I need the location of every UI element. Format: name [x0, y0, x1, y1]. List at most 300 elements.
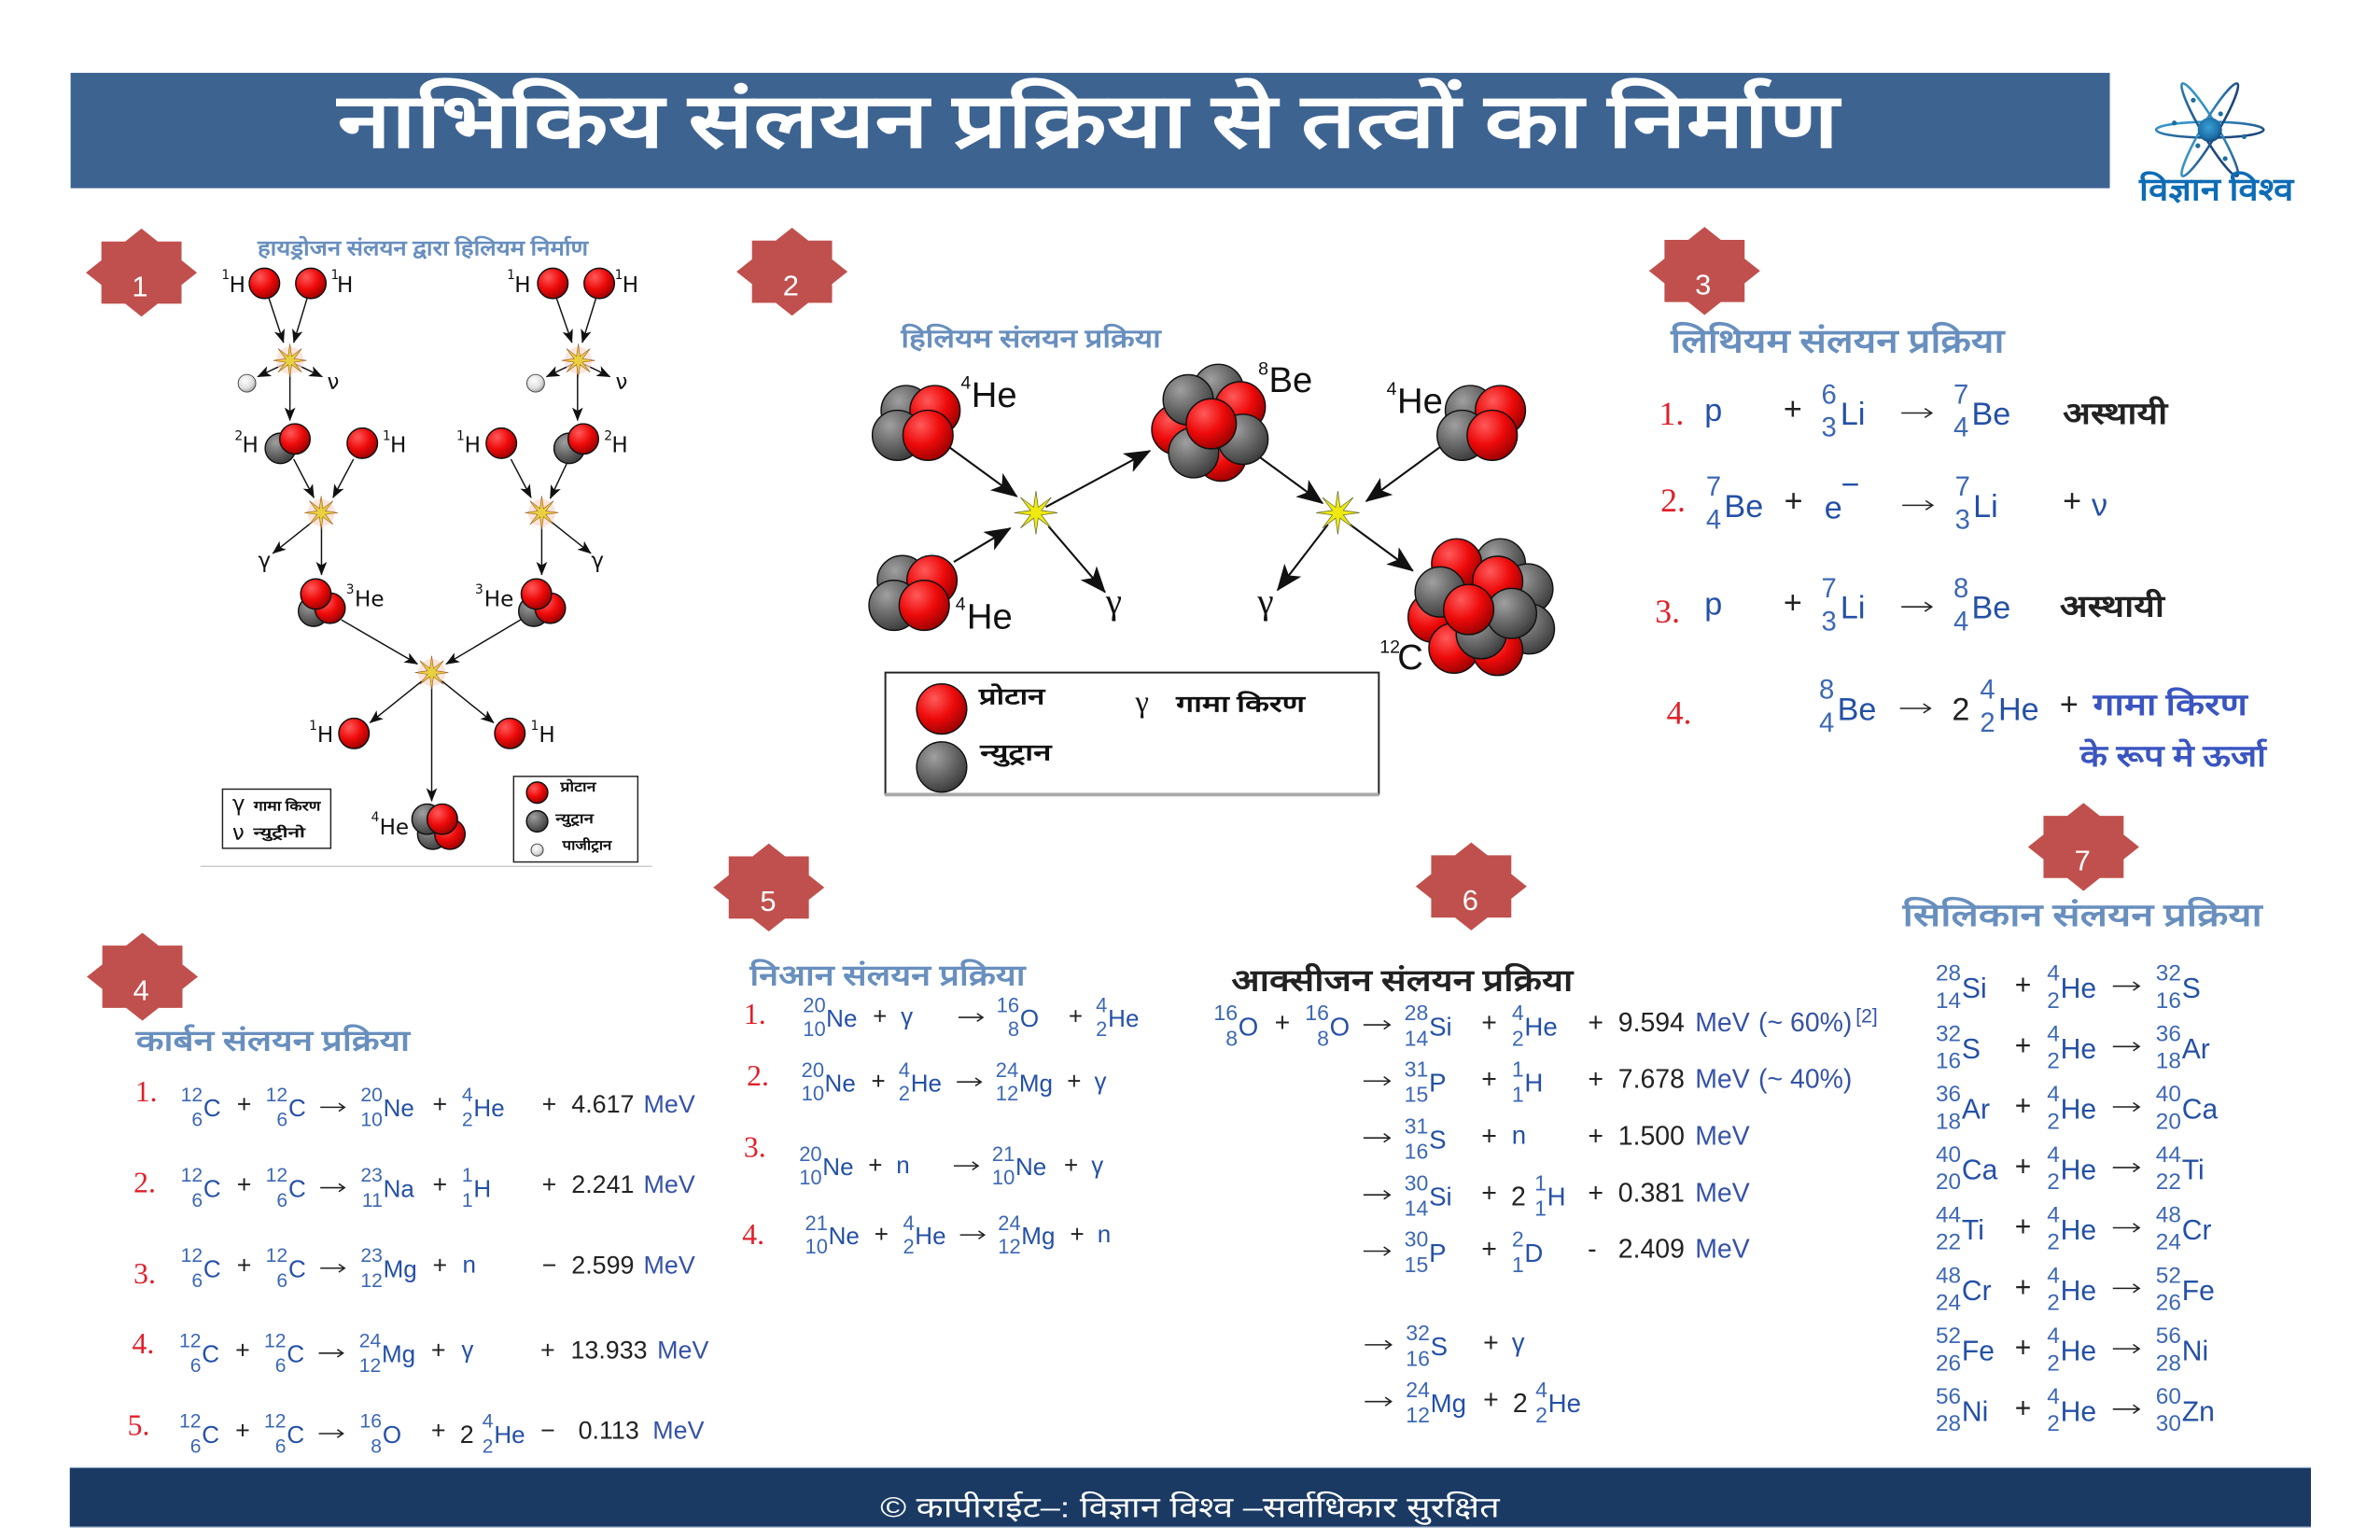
- diagram: proton-proton chain: H: [465, 434, 481, 458]
- heading 1: हायड्रोजन संलयन द्वारा हिलियम निर्माण: [257, 236, 590, 261]
- reaction 1: S: [2182, 973, 2201, 1004]
- legend: particles and gamma ray: प्रोटान: [978, 683, 1046, 710]
- reaction 2: ν: [2092, 487, 2107, 523]
- reaction 4: +: [875, 1220, 889, 1248]
- reaction 5: 6: [275, 1435, 287, 1457]
- diagram: triple-alpha process: 12: [1379, 637, 1400, 657]
- reaction 5: 12: [179, 1410, 201, 1432]
- reaction 4: C: [287, 1340, 304, 1368]
- panel 3: lithium fusion: [1649, 227, 2268, 774]
- reaction 3: [1655, 574, 2166, 637]
- reaction 1: C: [288, 1094, 306, 1122]
- diagram: proton-proton chain: γ: [258, 549, 271, 573]
- reaction row 2: 31: [1405, 1057, 1428, 1081]
- reaction 2: [747, 1058, 1107, 1105]
- reaction 4: Ne: [829, 1222, 860, 1250]
- reaction row 4: +: [1588, 1178, 1603, 1208]
- reaction row 7: 2: [1513, 1389, 1528, 1419]
- reaction 7: 2: [2047, 1351, 2060, 1376]
- reaction 3: 3.: [744, 1131, 766, 1164]
- reaction row 7: 2: [1535, 1403, 1547, 1427]
- reaction 1: +: [237, 1090, 251, 1118]
- reaction 1: [1659, 380, 2169, 443]
- reaction 1: Be: [1972, 397, 2010, 432]
- reaction row 4: 0.381: [1618, 1178, 1685, 1208]
- reaction 4: 8: [1819, 676, 1834, 706]
- carbon-12 nucleus: [1408, 539, 1554, 676]
- legend: particles: पाजीट्रान: [561, 837, 612, 854]
- reaction row 7: 24: [1406, 1378, 1430, 1402]
- reaction 5: +: [2015, 1211, 2031, 1242]
- reaction row 7: Mg: [1431, 1389, 1466, 1418]
- badge 6: [1416, 843, 1527, 931]
- reaction 4: Mg: [382, 1340, 415, 1368]
- reaction 2: MeV: [644, 1170, 695, 1198]
- badge 7: [2028, 803, 2139, 891]
- reaction row 1: O: [1239, 1012, 1258, 1041]
- reaction 4: 2: [903, 1235, 915, 1258]
- reaction row 1: 9.594: [1618, 1008, 1685, 1038]
- reaction 4: 13.933: [570, 1336, 648, 1364]
- reaction 2: +: [1067, 1067, 1081, 1095]
- reaction 5: C: [287, 1421, 304, 1449]
- reaction row 1: +: [1588, 1008, 1603, 1038]
- diagram: triple-alpha process: He: [972, 375, 1017, 415]
- reaction row 2: 1: [1512, 1057, 1524, 1081]
- panel 4: carbon fusion: [87, 932, 708, 1457]
- reaction 4: 12: [359, 1355, 381, 1377]
- reaction 1: 4: [1096, 994, 1107, 1017]
- reaction 7: 26: [1936, 1351, 1961, 1376]
- title: नाभिकिय संलयन प्रक्रिया से तत्वों का निर्माण: [335, 77, 1842, 164]
- reaction 1: γ: [901, 1002, 913, 1030]
- helium-4 nucleus, right: [1437, 385, 1525, 460]
- reaction 5: 6: [190, 1435, 201, 1457]
- reaction 4: 10: [805, 1235, 828, 1258]
- reaction 2: 10: [802, 1082, 824, 1105]
- reaction 2: 1: [462, 1165, 473, 1186]
- diagram: triple-alpha process: γ: [1256, 581, 1274, 622]
- reaction 4: 2: [2047, 1169, 2060, 1195]
- legend: gamma and neutrino: गामा किरण: [253, 797, 322, 814]
- reaction row 2: 15: [1405, 1083, 1428, 1107]
- reaction 4: [132, 1327, 708, 1377]
- reaction 2: He: [2061, 1034, 2096, 1065]
- reaction 1: अस्थायी: [2063, 396, 2169, 431]
- legend: particles: प्रोटान: [559, 778, 597, 795]
- helium-4 nucleus, top left: [873, 385, 960, 460]
- reaction 3: 2.599: [571, 1251, 634, 1279]
- reaction 1: 4.617: [571, 1090, 634, 1118]
- diagram: triple-alpha process: C: [1397, 637, 1423, 678]
- reaction 2: Ar: [2182, 1034, 2210, 1065]
- reaction 1: [744, 994, 1139, 1041]
- reaction 2: 18: [2156, 1049, 2181, 1074]
- reaction row 1: 2: [1512, 1026, 1524, 1050]
- reaction 5: 48: [2156, 1203, 2181, 1228]
- diagram: proton-proton chain: 1: [507, 268, 515, 283]
- reaction 2: +: [432, 1170, 447, 1198]
- reaction 5: O: [383, 1421, 401, 1449]
- reaction row 5: 30: [1405, 1227, 1428, 1252]
- reaction row 4: 14: [1405, 1197, 1428, 1221]
- diagram: proton-proton chain: H: [390, 434, 406, 458]
- reaction 4: [742, 1211, 1111, 1258]
- reaction 1: Ne: [826, 1004, 857, 1032]
- reaction 1: 16: [2156, 988, 2181, 1014]
- diagram: proton-proton chain: 3: [346, 582, 355, 597]
- reaction 1: 4: [462, 1085, 473, 1106]
- reaction 1: 14: [1936, 988, 1961, 1014]
- reaction 3: 6: [191, 1270, 203, 1292]
- reaction row 4: 2: [1511, 1183, 1526, 1212]
- reaction 4: Mg: [1021, 1222, 1055, 1250]
- reaction 6: 48: [1936, 1264, 1961, 1289]
- reaction 1: 7: [1953, 380, 1968, 410]
- reaction 5: 2: [2047, 1230, 2060, 1255]
- badge 2: 2: [783, 269, 799, 301]
- reaction 3: अस्थायी: [2060, 588, 2166, 623]
- reaction row 1: 16: [1213, 1001, 1238, 1025]
- reaction 4: +: [235, 1336, 250, 1364]
- reaction 1: 6: [1822, 380, 1837, 410]
- reaction 2: 7: [1706, 472, 1721, 502]
- header banner: [71, 73, 2110, 189]
- reaction 3: 21: [992, 1142, 1015, 1166]
- diagram: triple-alpha process: Be: [1269, 360, 1312, 400]
- reaction row 4: [1364, 1170, 1750, 1221]
- reaction 8: Zn: [2182, 1396, 2215, 1427]
- reaction 8: 60: [2156, 1384, 2181, 1409]
- reaction 4: n: [1098, 1220, 1111, 1248]
- reaction 3: 4: [2047, 1082, 2060, 1107]
- reaction 5: 4: [483, 1410, 494, 1432]
- reaction 2: 1: [462, 1190, 473, 1211]
- reaction 1: Li: [1841, 397, 1865, 432]
- diagram: proton-proton chain: He: [380, 816, 409, 840]
- reaction 3: 18: [1936, 1109, 1961, 1134]
- reaction 4: He: [2061, 1155, 2096, 1185]
- reaction 3: +: [2015, 1090, 2031, 1121]
- reaction 5: He: [2061, 1215, 2096, 1246]
- reaction 1: 6: [276, 1110, 287, 1131]
- diagram: proton-proton chain: H: [611, 434, 628, 458]
- reaction 7: +: [2015, 1333, 2031, 1364]
- diagram: proton-proton chain: He: [484, 587, 513, 611]
- reaction 3: 20: [2156, 1109, 2181, 1134]
- reaction row 2: P: [1429, 1069, 1447, 1098]
- diagram: proton-proton chain: ν: [615, 370, 627, 394]
- reaction 3: Ne: [822, 1153, 854, 1181]
- reaction 4: 4.: [742, 1218, 764, 1251]
- diagram: proton-proton chain: He: [355, 587, 385, 611]
- reaction 1: He: [2061, 973, 2096, 1004]
- reaction 4: 6: [275, 1355, 287, 1377]
- reaction row 2: +: [1588, 1064, 1603, 1094]
- panel 2: helium fusion: [736, 228, 1554, 796]
- reaction row 3: +: [1588, 1121, 1603, 1151]
- reaction 4: 20: [1936, 1169, 1961, 1195]
- reaction 5: MeV: [652, 1417, 705, 1445]
- reaction 4: 44: [2156, 1142, 2181, 1168]
- reaction row 1: Si: [1429, 1012, 1452, 1041]
- reaction 2: Na: [384, 1174, 414, 1202]
- reaction row 5: +: [1481, 1235, 1497, 1265]
- panel 6: oxygen fusion: [1213, 843, 1878, 1427]
- reaction 4: MeV: [657, 1336, 708, 1364]
- legend: gamma and neutrino: [222, 789, 330, 848]
- reaction 5: −: [540, 1417, 555, 1445]
- reaction 2: 12: [266, 1165, 287, 1186]
- reaction 6: +: [2015, 1272, 2031, 1303]
- reaction 3: 6: [276, 1270, 287, 1292]
- reaction row 3: +: [1481, 1121, 1497, 1151]
- footer bar: [70, 1467, 2311, 1528]
- reaction 2: Mg: [1019, 1069, 1053, 1097]
- reaction 2: 4: [2047, 1021, 2060, 1046]
- reaction row 2: 1: [1512, 1083, 1524, 1107]
- reaction 2: S: [1962, 1034, 1981, 1065]
- legend: particles and gamma ray: गामा किरण: [1175, 691, 1307, 718]
- reaction 2: 2.: [1660, 482, 1686, 519]
- reaction 4: γ: [461, 1336, 473, 1364]
- reaction 6: He: [2061, 1276, 2096, 1307]
- reaction 4: 6: [190, 1355, 201, 1377]
- heading 3: लिथियम संलयन प्रक्रिया: [1670, 321, 2007, 359]
- reaction 4: 4: [2047, 1142, 2060, 1168]
- reaction 2: e: [1825, 491, 1842, 526]
- badge 5: [713, 844, 824, 931]
- reaction row 5: P: [1429, 1239, 1447, 1267]
- reaction 3: n: [463, 1251, 476, 1279]
- helium-4 nucleus, bottom left: [869, 555, 957, 630]
- badge 1: [86, 229, 197, 316]
- reaction 5: 2: [460, 1421, 474, 1449]
- reaction row 4: 30: [1405, 1170, 1428, 1195]
- reaction row 5: 2.409: [1618, 1235, 1685, 1265]
- reaction row 2: MeV: [1695, 1064, 1750, 1094]
- reaction 2: +: [1785, 483, 1803, 519]
- reaction 1: O: [1020, 1004, 1039, 1032]
- reaction 8: 2: [2047, 1411, 2060, 1436]
- reaction 3: 12: [360, 1270, 383, 1292]
- reaction 1: 16: [997, 994, 1019, 1017]
- reaction 1: 1.: [135, 1075, 158, 1108]
- reaction 5: Cr: [2182, 1215, 2212, 1246]
- reaction 2: 11: [362, 1190, 383, 1211]
- reaction 3: 8: [1953, 574, 1968, 604]
- reaction 2: +: [871, 1067, 886, 1095]
- reaction row 1: MeV: [1695, 1008, 1750, 1038]
- reaction 2: γ: [1095, 1067, 1107, 1095]
- badge 3: [1649, 227, 1760, 315]
- reaction row 1: He: [1524, 1012, 1558, 1041]
- reaction 4: 4: [1819, 708, 1834, 738]
- reaction 3: C: [288, 1254, 306, 1282]
- heading 2: हिलियम संलयन प्रक्रिया: [900, 323, 1163, 353]
- reaction 2: [1936, 1021, 2210, 1074]
- reaction 4: 4: [1980, 676, 1995, 706]
- diagram: triple-alpha process: [869, 359, 1554, 796]
- reaction 2: 2: [899, 1082, 910, 1105]
- reaction row 2: [1364, 1057, 1852, 1107]
- reaction 1: 20: [803, 994, 826, 1017]
- reaction 3: 23: [360, 1245, 383, 1267]
- diagram: proton-proton chain: 1: [221, 268, 230, 283]
- reaction 3: Mg: [384, 1254, 417, 1282]
- reaction row 5: 15: [1405, 1253, 1428, 1277]
- heading 5: निआन संलयन प्रक्रिया: [749, 958, 1027, 991]
- diagram: proton-proton chain: 1: [615, 268, 623, 283]
- reaction 3: +: [868, 1151, 882, 1179]
- reaction 2: 12: [996, 1082, 1018, 1105]
- reaction row 3: S: [1429, 1126, 1447, 1155]
- reaction 3: [1936, 1082, 2218, 1134]
- reaction 7: 52: [1936, 1323, 1961, 1349]
- diagram: proton-proton chain: γ: [591, 549, 604, 573]
- reaction 2: 20: [802, 1058, 824, 1082]
- diagram: proton-proton chain: 1: [456, 429, 465, 444]
- reaction 3: 12: [181, 1245, 203, 1267]
- reaction row 1: 28: [1405, 1001, 1428, 1025]
- reaction 4: +: [431, 1336, 446, 1364]
- reaction 6: 52: [2156, 1264, 2181, 1289]
- reaction row 2: 7.678: [1618, 1064, 1685, 1094]
- reaction 1: 12: [266, 1085, 287, 1106]
- reaction 3: 3.: [133, 1257, 156, 1290]
- legend: gamma and neutrino: γ: [232, 791, 245, 816]
- reaction row 7: He: [1548, 1389, 1581, 1418]
- diagram: triple-alpha process: He: [967, 597, 1013, 637]
- reaction 4: के रूप मे ऊर्जा: [2079, 738, 2268, 774]
- reaction row 1: +: [1275, 1008, 1290, 1038]
- reaction 2: +: [542, 1170, 556, 1198]
- reaction 3: 2: [2047, 1109, 2060, 1134]
- reaction 6: 2: [2047, 1291, 2060, 1316]
- reaction 3: [744, 1131, 1103, 1189]
- reaction 3: [133, 1245, 695, 1292]
- reaction row 5: 1: [1512, 1253, 1524, 1277]
- reaction row 4: 1: [1534, 1170, 1547, 1195]
- reaction 3: −: [542, 1251, 556, 1279]
- reaction 2: +: [237, 1170, 251, 1198]
- reaction 5: Ti: [1962, 1215, 1984, 1246]
- reaction row 2: +: [1481, 1064, 1497, 1094]
- reaction 5: +: [235, 1417, 250, 1445]
- reaction 2: C: [203, 1174, 221, 1202]
- reaction row 1: 8: [1225, 1026, 1238, 1050]
- reaction 7: He: [2061, 1337, 2096, 1367]
- reaction 4: +: [1071, 1220, 1085, 1248]
- reaction 3: 36: [1936, 1082, 1961, 1107]
- reaction 3: 40: [2156, 1082, 2181, 1107]
- diagram: proton-proton chain: 2: [604, 429, 612, 444]
- badge 2: [736, 228, 847, 315]
- diagram: proton-proton chain: 4: [371, 810, 380, 825]
- reaction row 4: +: [1481, 1178, 1497, 1208]
- reaction 4: +: [2060, 687, 2079, 722]
- reaction 5: +: [431, 1417, 446, 1445]
- reaction 3: Li: [1841, 591, 1865, 626]
- reaction 3: Ar: [1962, 1095, 1990, 1126]
- legend: gamma and neutrino: न्युट्रीनो: [252, 824, 307, 842]
- reaction 5: [1936, 1203, 2212, 1255]
- reaction 8: 4: [2047, 1384, 2060, 1409]
- reaction row 1: O: [1330, 1012, 1350, 1041]
- reaction 3: 3: [1822, 607, 1837, 637]
- diagram: proton-proton chain: [201, 268, 651, 866]
- reaction 3: Ca: [2182, 1095, 2218, 1126]
- reaction 5: 22: [1936, 1230, 1961, 1255]
- legend: particles and gamma ray: γ: [1134, 686, 1149, 720]
- reaction 4: +: [540, 1336, 555, 1364]
- reaction 2: He: [911, 1069, 942, 1097]
- panel 7: silicon fusion: [1901, 803, 2263, 1436]
- badge 7: 7: [2075, 845, 2091, 877]
- diagram: proton-proton chain: H: [317, 723, 333, 748]
- reaction row 1: +: [1481, 1008, 1497, 1038]
- diagram: proton-proton chain: H: [514, 273, 531, 298]
- reaction row 1: (~ 60%): [1758, 1008, 1852, 1038]
- reaction 3: +: [432, 1251, 447, 1279]
- reaction 1: 6: [191, 1110, 203, 1131]
- reaction 6: [1936, 1264, 2215, 1316]
- reaction row 1: 8: [1317, 1026, 1329, 1050]
- reaction 7: 4: [2047, 1323, 2060, 1349]
- reaction row 1: [1213, 1001, 1878, 1050]
- reaction 8: Ni: [1962, 1396, 1988, 1427]
- reaction 7: 28: [2156, 1351, 2181, 1376]
- reaction 5: 5.: [128, 1409, 149, 1442]
- reaction 2: 6: [191, 1190, 203, 1211]
- reaction 1: 10: [360, 1110, 383, 1131]
- reaction 1: 4: [1953, 413, 1968, 443]
- beryllium-8 nucleus: [1152, 364, 1268, 482]
- reaction 5: 8: [371, 1435, 382, 1457]
- reaction 1: C: [203, 1094, 221, 1122]
- reaction 5: He: [494, 1421, 525, 1449]
- reaction 1: 2: [2047, 988, 2060, 1014]
- badge 4: 4: [133, 974, 149, 1007]
- reaction row 7: [1365, 1378, 1581, 1427]
- reaction row 5: [1364, 1227, 1750, 1277]
- reaction 1: +: [432, 1090, 447, 1118]
- reaction 4: 4: [903, 1211, 915, 1235]
- reaction 8: 28: [1936, 1411, 1961, 1436]
- diagram: proton-proton chain: 1: [331, 268, 339, 283]
- logo: vigyan vishwa atom: [2138, 79, 2294, 208]
- legend: particles: न्युट्रान: [554, 812, 595, 828]
- reaction row 1: 4: [1512, 1001, 1524, 1025]
- reaction 4: Ca: [1962, 1155, 1998, 1185]
- reaction 1: +: [1069, 1002, 1083, 1030]
- reaction 4: Ti: [2182, 1155, 2205, 1185]
- badge 4: [87, 932, 198, 1021]
- panel 1: hydrogen fusion: [86, 229, 651, 866]
- reaction 2: 2.: [133, 1166, 156, 1198]
- diagram: proton-proton chain: H: [243, 434, 259, 458]
- reaction 1: 32: [2156, 961, 2181, 987]
- reaction row 7: 12: [1406, 1403, 1430, 1427]
- reaction 3: γ: [1091, 1151, 1103, 1179]
- reaction 5: 2: [483, 1435, 494, 1457]
- reaction 1: p: [1704, 393, 1722, 428]
- reaction 2: 12: [181, 1165, 203, 1186]
- reaction 1: [1936, 961, 2201, 1014]
- reaction 1: 12: [181, 1085, 203, 1106]
- reaction 4: 2: [1980, 708, 1995, 738]
- reaction row 2: (~ 40%): [1758, 1064, 1852, 1094]
